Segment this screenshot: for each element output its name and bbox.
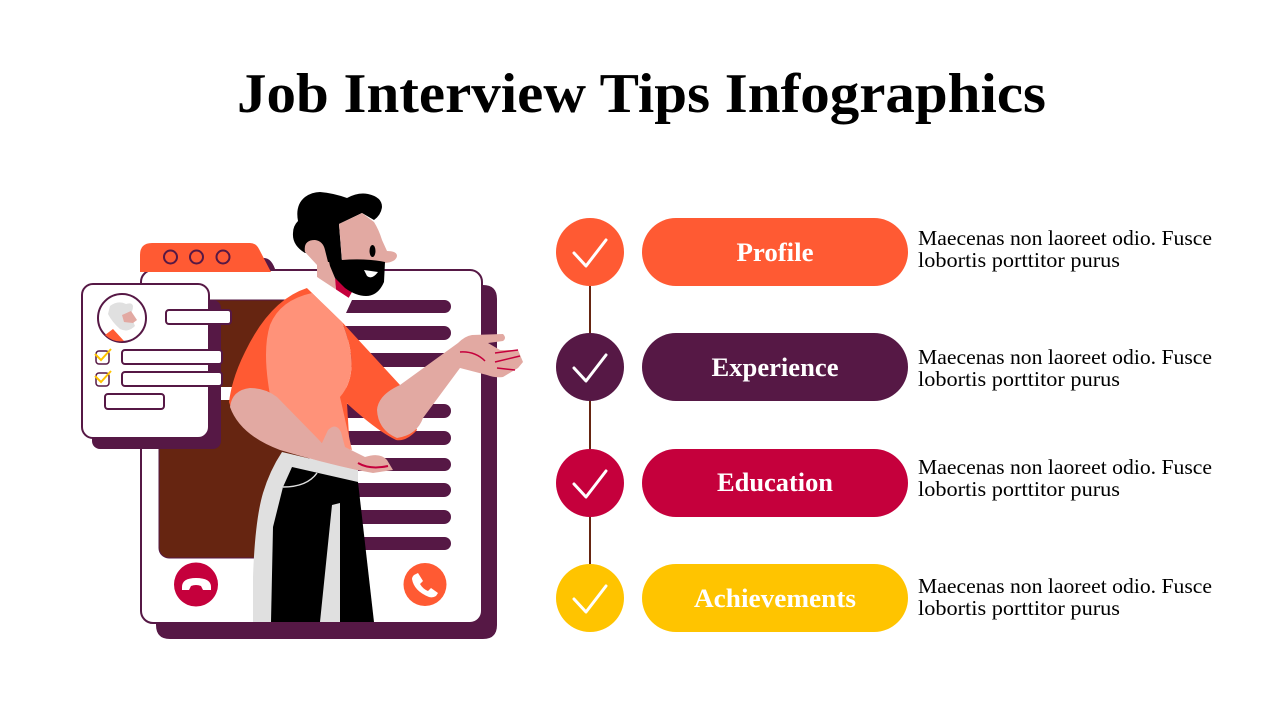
- row: profile: [556, 218, 1212, 286]
- red scarf: [335, 278, 352, 299]
- text: experience: lobortis porttitor purus: [918, 367, 1120, 391]
- torso: [266, 293, 352, 450]
- pill: education: [642, 449, 908, 517]
- video panel: [159, 300, 309, 558]
- beard: [325, 244, 385, 296]
- icon: answer call: [404, 563, 446, 606]
- text: profile: lobortis porttitor purus: [918, 248, 1120, 272]
- pill: profile: [642, 218, 908, 286]
- text lines: [330, 300, 451, 550]
- main window: [141, 270, 482, 623]
- checkboxes: [95, 349, 111, 386]
- icon: hang up: [174, 562, 218, 606]
- icon: check circle: [556, 449, 624, 517]
- man: [229, 192, 523, 622]
- neck: [305, 243, 336, 292]
- text: education: Maecenas non laoreet odio. Fusce: [918, 455, 1212, 479]
- eye: [370, 245, 376, 257]
- pill: experience: [642, 333, 908, 401]
- icon: check circle: [556, 564, 624, 632]
- icon: check circle: [556, 333, 624, 401]
- row: achievements: [556, 564, 1212, 632]
- avatar: [98, 294, 146, 342]
- window shadow: [156, 258, 497, 639]
- text: achievements: lobortis porttitor purus: [918, 596, 1120, 620]
- mouth: [364, 270, 378, 277]
- ear: [305, 240, 328, 264]
- illustration: video interview: [82, 192, 523, 639]
- text: achievements: Maecenas non laoreet odio. Fusce: [918, 574, 1212, 598]
- collar: [307, 277, 352, 322]
- text: experience: Maecenas non laoreet odio. Fusce: [918, 345, 1212, 369]
- text: education: lobortis porttitor purus: [918, 477, 1120, 501]
- pill: profile: Profile: [736, 238, 814, 267]
- icon: check circle: [556, 218, 624, 286]
- text: profile: Maecenas non laoreet odio. Fusce: [918, 226, 1212, 250]
- pill: experience: Experience: [712, 353, 838, 382]
- pill: education: Education: [717, 468, 834, 497]
- window tab: [140, 243, 271, 272]
- right arm and hand: [377, 334, 523, 438]
- pill: achievements: [642, 564, 908, 632]
- shirt back: [229, 288, 350, 452]
- face: [339, 213, 397, 263]
- title: Job Interview Tips Infographics: [237, 63, 1046, 125]
- pill: achievements: Achievements: [694, 584, 856, 613]
- row: education: [556, 449, 1212, 517]
- connector line: [589, 286, 591, 564]
- row: experience: [556, 333, 1212, 401]
- card fields: [105, 310, 231, 409]
- trousers: [253, 452, 358, 622]
- resume card: [82, 284, 231, 449]
- hair: [293, 192, 382, 262]
- left arm and hand: [230, 388, 393, 473]
- sleeve: [340, 322, 417, 440]
